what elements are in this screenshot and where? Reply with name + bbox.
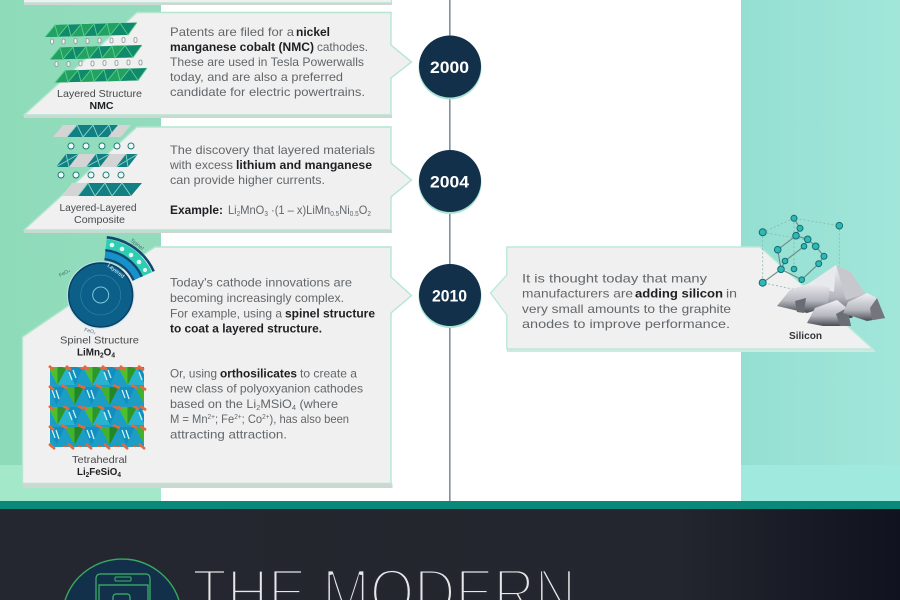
text: 2010 description: For example, using a — [170, 306, 282, 320]
icon: spinel structure diagram: FeO₄ — [58, 268, 71, 279]
icon: phone in circle — [65, 559, 179, 600]
panel: previous card edge — [24, 0, 392, 5]
year marker: 2000: 2000 — [430, 58, 469, 77]
text: 2010 description: to coat a layered structure. — [170, 321, 322, 335]
text: silicon description: very small amounts to the graphite — [522, 302, 731, 316]
text: orthosilicates description: 2+ — [262, 414, 270, 421]
panel: silicon card — [490, 247, 876, 352]
text: orthosilicates description: 4 — [292, 405, 296, 412]
text: orthosilicates description: Or, using — [170, 366, 217, 380]
text: orthosilicates description: 2+ — [208, 414, 215, 421]
panel: left mint column — [0, 0, 161, 501]
text: 2004 description: MnO — [240, 203, 264, 217]
label: tetrahedral: Tetrahedral — [72, 454, 127, 466]
label: spinel structure: 2 — [100, 352, 104, 360]
text: orthosilicates description: ; Fe — [215, 412, 235, 426]
year marker: 2004 — [418, 150, 482, 214]
text: 2004 description: Li — [228, 203, 237, 217]
label: layered-layered composite: Composite — [74, 214, 125, 226]
panel: dark footer section — [0, 509, 900, 600]
label: layered structure NMC: Layered Structure — [57, 88, 142, 100]
text: 2010 description — [170, 276, 375, 335]
text: orthosilicates description: orthosilicates — [220, 366, 297, 380]
text: 2000 description: Patents are filed for a — [170, 25, 294, 39]
text: 2000 description — [170, 25, 368, 99]
text: orthosilicates description — [170, 366, 363, 441]
label: layered-layered composite: Layered-Layered — [60, 202, 137, 214]
label: spinel structure: O — [104, 346, 111, 358]
text: 2004 description: ·(1 – x)LiMn — [268, 203, 330, 217]
text: 2004 description: 3 — [264, 211, 268, 218]
text: 2000 description: cathodes. — [317, 40, 368, 54]
text: orthosilicates description: ), has also been — [270, 412, 349, 426]
text: silicon description: adding silicon — [635, 287, 723, 301]
text: 2004 description: with excess — [169, 158, 233, 172]
timeline axis — [449, 0, 451, 501]
text: 2000 description: manganese cobalt (NMC) — [170, 40, 314, 54]
text: 2004 description: O — [359, 203, 367, 217]
icon: spinel structure diagram: Layered — [106, 263, 125, 280]
text: orthosilicates description: new class of polyoxyanion cathodes — [170, 382, 363, 396]
text: silicon description: anodes to improve performance. — [522, 317, 730, 331]
label: silicon: Silicon — [789, 330, 822, 342]
label: spinel structure: Spinel Structure — [60, 334, 139, 346]
label: spinel structure — [60, 334, 139, 360]
text: silicon description: in — [726, 287, 737, 301]
text: 2004 description: 0.5 — [350, 211, 359, 218]
panel: 2010 today's innovations card — [22, 237, 412, 488]
label: tetrahedral: Li — [77, 466, 86, 478]
text: 2010 description: Today's cathode innovations are — [170, 276, 352, 290]
text: 2004 description: Ni — [339, 203, 350, 217]
year marker: 2010 — [418, 264, 482, 328]
text: 2004 description: 0.5 — [330, 211, 339, 218]
label: layered-layered composite — [60, 202, 137, 226]
text: orthosilicates description: based on the Li — [170, 397, 252, 411]
panel: 2004 layered-layered card — [24, 125, 412, 233]
text: 2000 description: These are used in Tesla Powerwalls — [170, 55, 364, 69]
text: 2010 description: spinel structure — [285, 306, 375, 320]
text: 2004 description: The discovery that layered materials — [170, 143, 375, 157]
panel: right teal column — [741, 0, 900, 501]
text: 2004 description: 2 — [367, 211, 371, 218]
text: 2004 description: Example: — [170, 203, 223, 217]
icon: spinel structure diagram — [58, 237, 154, 336]
teal divider band — [0, 501, 900, 509]
text: 2000 description: candidate for electric powertrains. — [170, 85, 365, 99]
text: 2004 description — [169, 143, 375, 218]
icon: spinel structure diagram: FeO₄ — [83, 327, 96, 336]
text: orthosilicates description: MSiO — [260, 397, 292, 411]
text: orthosilicates description: 2+ — [234, 414, 242, 421]
text: orthosilicates description: attracting attraction. — [170, 427, 287, 441]
text: orthosilicates description: to create a — [300, 366, 357, 380]
label: tetrahedral: 2 — [86, 472, 89, 479]
text: 2000 description: today, and are also a preferred — [170, 70, 343, 84]
text: 2004 description: 2 — [237, 211, 240, 218]
label: tetrahedral: 4 — [117, 472, 121, 479]
text: 2000 description: nickel — [296, 25, 330, 39]
text: silicon description: It is thought today that many — [522, 271, 707, 285]
year marker: 2000 — [418, 36, 482, 100]
label: tetrahedral: FeSiO — [89, 466, 117, 478]
label: layered structure NMC: NMC — [90, 100, 114, 112]
icon: silicon lattice — [759, 215, 843, 291]
text: 2004 description: lithium and manganese — [236, 158, 372, 172]
icon: tetrahedral crystal structure — [49, 366, 146, 449]
label: spinel structure: 4 — [111, 352, 115, 360]
text: orthosilicates description: (where — [296, 397, 338, 411]
text: silicon description — [522, 271, 737, 331]
text: orthosilicates description: 2 — [256, 405, 260, 412]
year marker: 2004: 2004 — [430, 172, 470, 192]
text: silicon description: manufacturers are — [522, 287, 633, 301]
text: 2010 description: becoming increasingly complex. — [170, 291, 344, 305]
icon: layered-layered composite structure — [53, 125, 142, 196]
label: layered structure NMC — [57, 88, 142, 112]
text: orthosilicates description: M = Mn — [170, 412, 210, 426]
icon: silicon rocks — [777, 265, 885, 326]
year marker: 2010: 2010 — [432, 286, 467, 306]
text: 2004 description: can provide higher currents. — [170, 173, 325, 187]
text: orthosilicates description: ; Co — [242, 412, 262, 426]
label: spinel structure: LiMn — [77, 346, 102, 358]
panel: 2000 NMC card — [24, 12, 412, 118]
icon: spinel structure diagram: Spinel — [129, 238, 145, 252]
icon: layered NMC structure — [45, 22, 147, 82]
label: tetrahedral — [72, 454, 127, 479]
